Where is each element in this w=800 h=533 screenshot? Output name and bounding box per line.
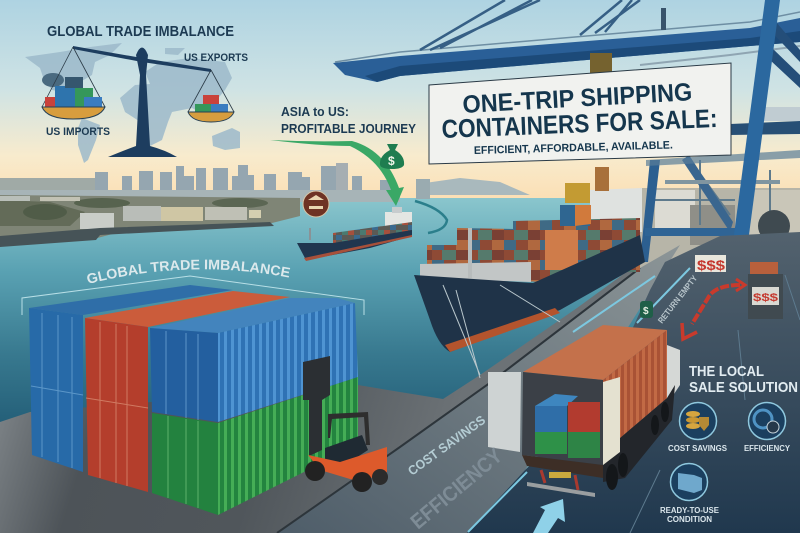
label: ready-to-use condition: CONDITION: [667, 515, 712, 524]
local sale solution heading: [689, 363, 798, 396]
distant truck: [748, 262, 783, 319]
small money tag: [640, 301, 653, 318]
cargo boxes: [535, 394, 600, 458]
container interior: [522, 372, 603, 465]
bracket over containers: [22, 276, 364, 315]
icon: money bag: [380, 144, 404, 169]
blue direction arrow: [533, 499, 565, 533]
banner: ONE-TRIP SHIPPING: [462, 78, 693, 119]
scale with containers: [42, 46, 234, 157]
water: [0, 198, 800, 438]
dollar sign board: [695, 255, 726, 273]
icon: ready-to-use container: [670, 464, 708, 500]
small container ship: [297, 207, 412, 261]
world map: [25, 43, 240, 163]
teal route: [415, 201, 447, 233]
icon: money bag: $: [388, 154, 395, 168]
blue upper container: [150, 298, 358, 422]
small money tag: $: [643, 306, 649, 317]
green lower container: [152, 377, 358, 515]
forklift: [303, 356, 388, 492]
crane legs: [640, 0, 800, 341]
quay ground: [0, 262, 640, 533]
port background structures: [640, 160, 800, 268]
scale title: GLOBAL TRADE IMBALANCE: [47, 23, 234, 40]
truck with open container: [488, 325, 680, 497]
curved heading: GLOBAL TRADE IMBALANCE: [87, 260, 290, 283]
label: ready-to-use condition: READY-TO-USE: [660, 506, 720, 515]
label: US exports: US EXPORTS: [184, 52, 248, 64]
blue container stack: [29, 285, 233, 472]
truck cab: [667, 345, 680, 400]
red container stack: [85, 291, 290, 492]
truck underbody: [603, 385, 675, 482]
shoreline land: [0, 195, 300, 247]
local sale solution heading: THE LOCAL: [689, 363, 764, 380]
tail bar: [527, 482, 595, 497]
text: cost savings: COST SAVINGS: [405, 412, 488, 478]
label: cost savings: COST SAVINGS: [668, 444, 728, 453]
chassis: [522, 455, 603, 478]
dollar sign board: $$$: [697, 257, 725, 273]
concrete strip: [277, 245, 680, 533]
sky background: [0, 0, 800, 200]
label: efficiency: EFFICIENCY: [744, 444, 791, 453]
text: efficiency: EFFICIENCY: [406, 444, 507, 533]
left door: [488, 372, 521, 452]
banner: [429, 63, 731, 164]
stacked containers: [29, 285, 358, 515]
container roof: [523, 325, 667, 380]
distant truck: $$$: [753, 292, 778, 304]
label: US imports: US IMPORTS: [46, 126, 110, 138]
banner: EFFICIENT, AFFORDABLE, AVAILABLE.: [474, 139, 673, 157]
crane boom: [333, 0, 800, 82]
Asia to US label: ASIA to US:: [281, 104, 349, 119]
road markings: [468, 268, 800, 533]
truck wheels: [606, 402, 669, 490]
skyline: [0, 163, 430, 202]
quay edge: [277, 268, 640, 533]
big container ship: [414, 167, 645, 378]
right door: [603, 377, 620, 465]
road: [467, 232, 800, 533]
icon: efficiency: [748, 402, 786, 440]
banner: CONTAINERS FOR SALE:: [441, 103, 718, 144]
label: ready-to-use condition: [660, 506, 720, 524]
red return arrow: [682, 279, 745, 339]
Asia to US label: PROFITABLE JOURNEY: [281, 121, 416, 136]
icon: pagoda badge: [303, 191, 329, 217]
Asia to US label: [281, 104, 416, 136]
text: return empty: RETURN EMPTY: [656, 273, 699, 325]
container side: [603, 330, 667, 465]
distant hills: [420, 178, 530, 195]
icon: cost savings: [680, 402, 716, 440]
green route arrow: [270, 140, 404, 206]
